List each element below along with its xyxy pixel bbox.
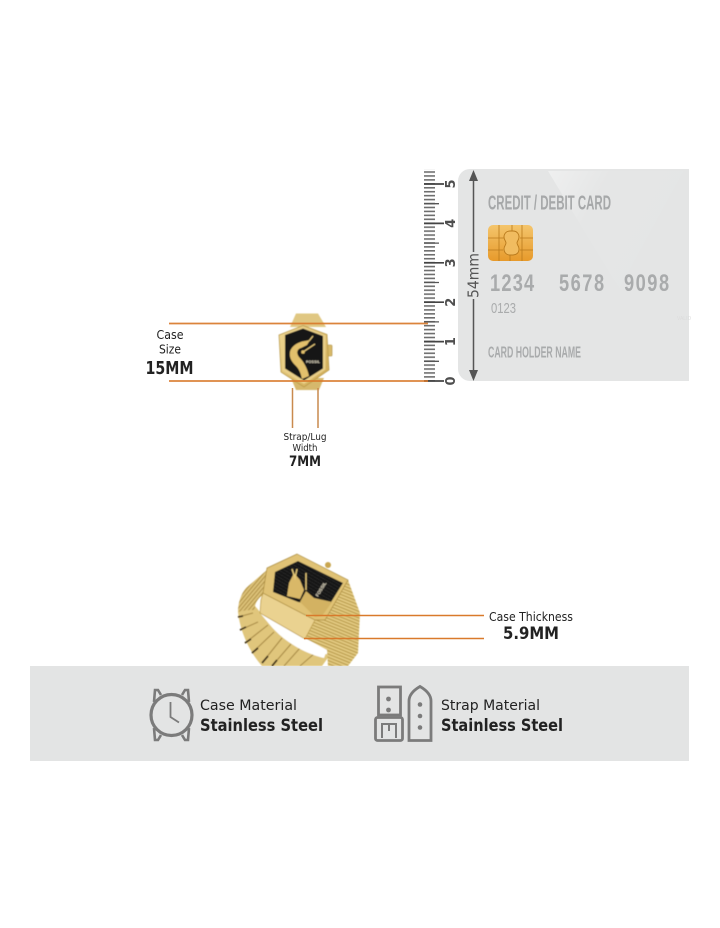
centimetre ticks bbox=[424, 184, 444, 381]
label: case thickness bbox=[489, 609, 573, 644]
card body bbox=[458, 169, 689, 381]
label: strap/lug width: 7MM bbox=[289, 454, 321, 470]
card number: 9098 bbox=[624, 270, 671, 297]
ring watch side view bbox=[238, 554, 360, 666]
crown bbox=[327, 345, 332, 356]
icon: watch bbox=[151, 690, 192, 740]
label: strap/lug width: Width bbox=[292, 443, 318, 454]
card glare bbox=[548, 171, 689, 300]
label: 54mm: 54mm bbox=[464, 253, 482, 298]
ruler numbers: 0 bbox=[444, 376, 459, 386]
watch front view bbox=[279, 314, 332, 390]
label: strap/lug width: Strap/Lug bbox=[284, 432, 326, 443]
label: case material: Case Material bbox=[200, 698, 297, 714]
ribbed shoulder right bbox=[305, 580, 360, 666]
label: case thickness: 5.9MM bbox=[503, 624, 559, 644]
label: case size: Size bbox=[159, 342, 181, 356]
card small number: 0123 bbox=[491, 300, 516, 317]
case side bbox=[260, 593, 315, 639]
card number: 5678 bbox=[559, 270, 606, 297]
ruler numbers: 3 bbox=[444, 258, 459, 267]
dial bbox=[285, 328, 323, 380]
label: case size bbox=[146, 327, 194, 379]
band background bbox=[30, 666, 689, 761]
chip bbox=[488, 225, 533, 261]
ruler numbers: 2 bbox=[444, 298, 459, 307]
case inner bevel bbox=[282, 327, 326, 384]
label: strap material: Stainless Steel bbox=[441, 716, 563, 736]
ribbed shoulder left bbox=[238, 570, 267, 612]
label: case material: Stainless Steel bbox=[200, 716, 323, 736]
case bbox=[279, 326, 329, 387]
dial logo: FOSSIL bbox=[315, 581, 328, 598]
label: strap material: Strap Material bbox=[441, 698, 540, 714]
half-centimetre ticks bbox=[424, 204, 439, 361]
watch logo: FOSSIL bbox=[306, 359, 321, 364]
crown bbox=[325, 562, 331, 568]
card holder name: CARD HOLDER NAME bbox=[488, 344, 581, 362]
ruler numbers: 1 bbox=[444, 337, 459, 346]
case top bbox=[263, 554, 348, 620]
expansion band bbox=[238, 600, 330, 666]
panel: credit card bbox=[458, 169, 691, 381]
dial gold figure bbox=[287, 573, 304, 599]
label: strap/lug width bbox=[284, 432, 326, 470]
snake hands bbox=[290, 340, 310, 379]
dial bbox=[273, 561, 343, 607]
card number: 1234 bbox=[490, 270, 535, 297]
measurement lines: case size bbox=[169, 324, 428, 381]
icon: strap and buckle bbox=[376, 686, 431, 740]
card faint text: VALID bbox=[677, 316, 691, 322]
card number bbox=[490, 270, 671, 297]
measurement lines: strap width bbox=[292, 388, 318, 428]
card title: CREDIT / DEBIT CARD bbox=[488, 192, 611, 214]
ruler numbers: 4 bbox=[444, 219, 459, 228]
measurement lines: case thickness bbox=[304, 616, 484, 638]
label: case size: 15MM bbox=[146, 359, 194, 379]
white inner ring opening bbox=[260, 613, 327, 658]
ruler numbers bbox=[444, 179, 459, 386]
label: strap material bbox=[441, 698, 563, 736]
millimetre ticks bbox=[424, 169, 435, 382]
panel: materials band bbox=[30, 666, 689, 761]
ruler bbox=[424, 169, 459, 386]
label: case material bbox=[200, 698, 323, 736]
strap bottom bbox=[291, 378, 324, 390]
arrow: 54mm height bbox=[464, 170, 482, 381]
strap top bbox=[290, 314, 326, 327]
label: case thickness: Case Thickness bbox=[489, 609, 573, 624]
label: case size: Case bbox=[156, 327, 184, 342]
ruler numbers: 5 bbox=[444, 179, 459, 189]
